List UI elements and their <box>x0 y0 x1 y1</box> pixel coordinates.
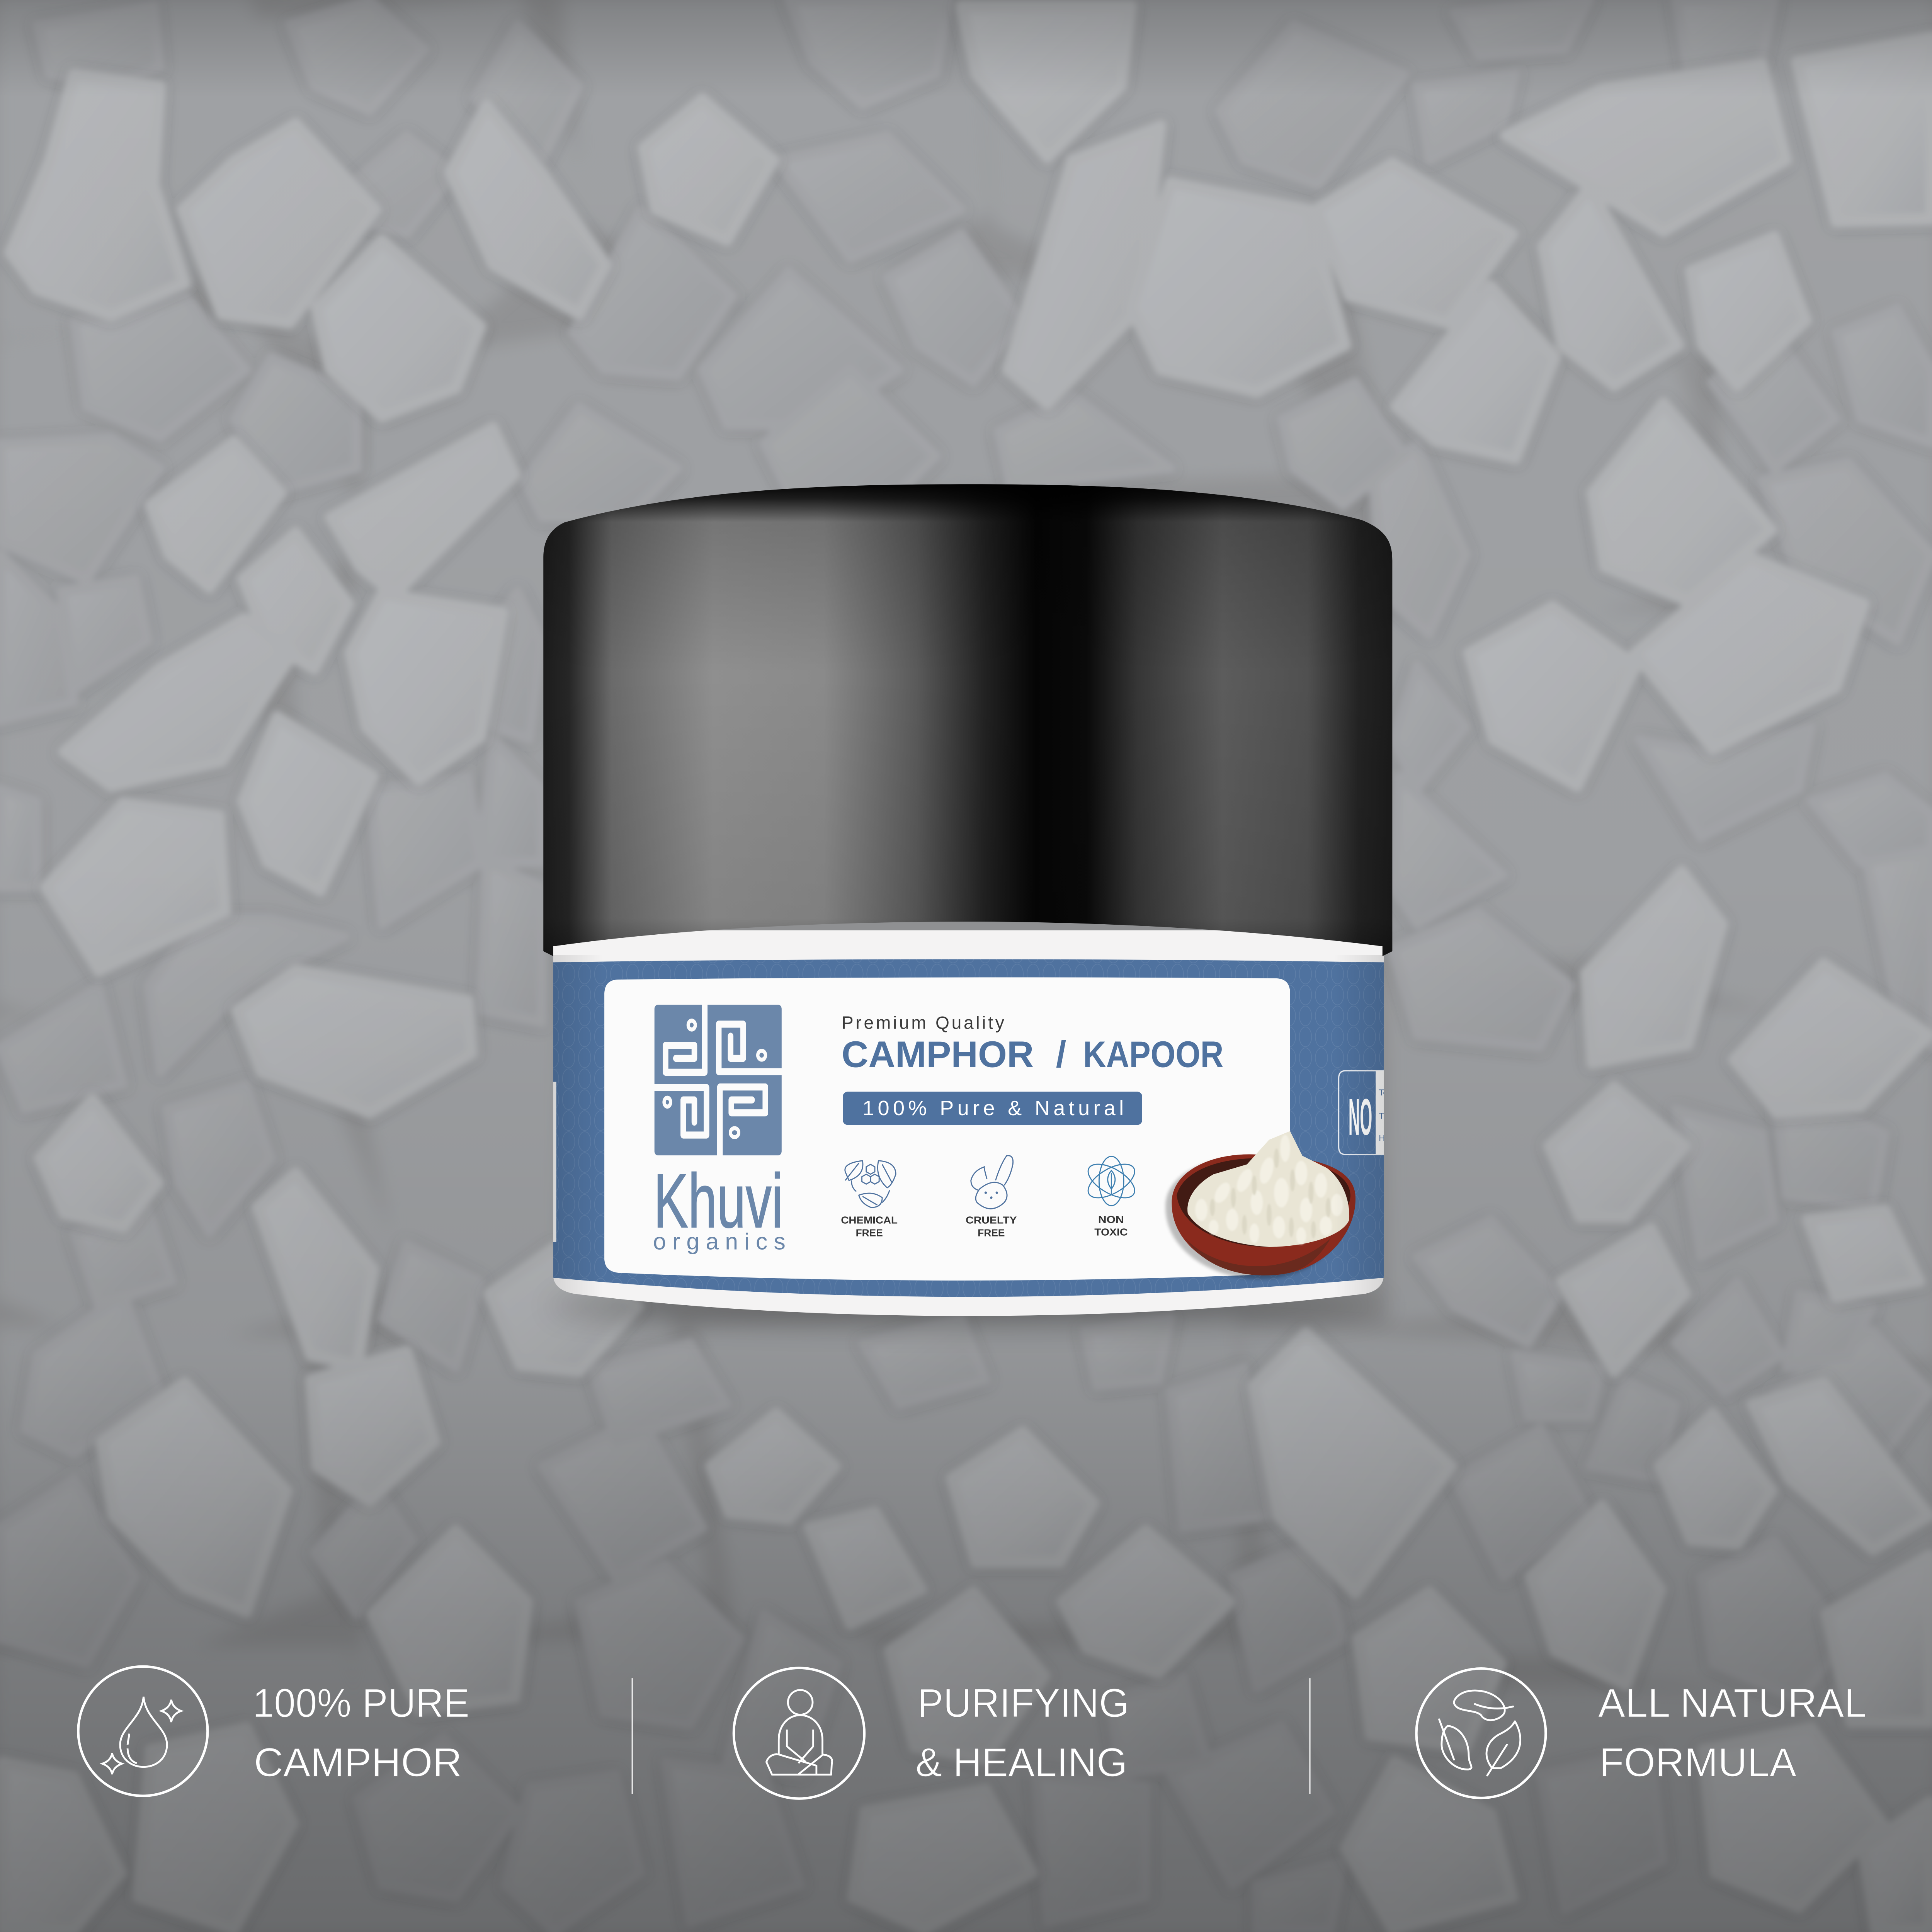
jar lid <box>543 484 1392 956</box>
camphor pile <box>1187 1131 1349 1247</box>
claim tab: NO: NO <box>1349 1088 1372 1146</box>
label: all natural formula: FORMULA <box>1599 1740 1796 1785</box>
heading: product name <box>842 1034 1223 1075</box>
icon: cruelty free <box>966 1156 1017 1239</box>
icon: non toxic <box>1083 1156 1140 1238</box>
heading: product name: KAPOOR <box>1083 1034 1223 1075</box>
label: 100% pure camphor <box>253 1681 469 1785</box>
logo: Khuvi organics <box>652 1001 786 1254</box>
benefit strip <box>78 1667 1867 1799</box>
claim tab: NO: Tin <box>1379 1111 1390 1121</box>
icon: non toxic: NON <box>1098 1214 1124 1225</box>
jar body <box>553 930 1384 1316</box>
organics wordmark: organics <box>653 1228 786 1254</box>
claim tab: NO: Tox <box>1379 1088 1392 1097</box>
white label panel <box>604 977 1290 1281</box>
label: 100% pure camphor: 100% PURE <box>253 1681 469 1726</box>
label edge shading <box>553 955 1384 1316</box>
icon: water drop <box>78 1667 207 1796</box>
label: all natural formula <box>1598 1681 1867 1785</box>
benefit: pure camphor <box>78 1667 469 1796</box>
icon: chemical free <box>841 1161 898 1239</box>
blue label band <box>553 959 1384 1297</box>
heading: product name: CAMPHOR <box>842 1034 1034 1075</box>
icon: cruelty free: CRUELTY <box>966 1215 1017 1226</box>
label: purifying and healing: & HEALING <box>915 1740 1128 1785</box>
icon: non toxic: TOXIC <box>1094 1227 1128 1238</box>
Khuvi wordmark: Khuvi <box>654 1158 783 1243</box>
icon: meditating person <box>734 1668 864 1799</box>
label: all natural formula: ALL NATURAL <box>1598 1681 1867 1726</box>
label: purifying and healing: PURIFYING <box>917 1681 1129 1726</box>
label: 100% pure camphor: CAMPHOR <box>254 1740 462 1785</box>
label: purifying and healing <box>915 1681 1129 1785</box>
benefit: all natural formula <box>1416 1668 1867 1798</box>
logo mark <box>652 1001 784 1158</box>
claim tab: NO: Hea <box>1379 1133 1395 1143</box>
heading: product name: / <box>1056 1034 1066 1075</box>
product jar <box>543 484 1395 1323</box>
benefit: purifying and healing <box>734 1668 1129 1799</box>
badge: pure and natural <box>843 1092 1142 1125</box>
icon: chemical free: FREE <box>856 1228 883 1239</box>
icon: chemical free: CHEMICAL <box>841 1215 898 1226</box>
bowl of camphor <box>1166 1131 1355 1279</box>
claim tab: NO <box>1339 1071 1395 1155</box>
heading: premium quality: Premium Quality <box>842 1013 1005 1033</box>
badge: pure and natural: 100% Pure & Natural <box>862 1097 1124 1120</box>
icon: cruelty free: FREE <box>978 1228 1005 1239</box>
icon: three leaves <box>1416 1668 1546 1798</box>
